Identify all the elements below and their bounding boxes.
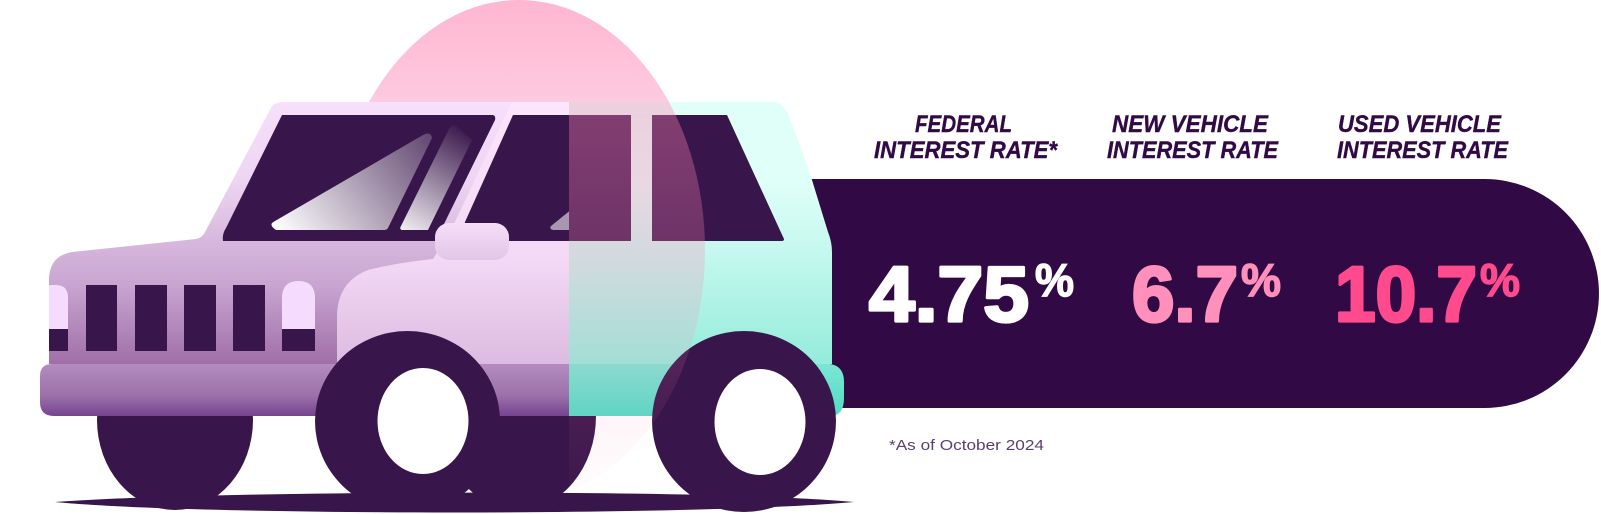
vehicle [40,102,844,512]
windshield [223,115,495,241]
left headlight [49,285,68,351]
grille bars [86,285,265,351]
value: 4.75%: % [1035,254,1074,306]
hidden far wheels [97,322,596,510]
label: used vehicle interest rate [1337,111,1509,164]
side mirror [435,223,509,260]
front wheel [315,331,500,512]
label: new vehicle interest rate [1107,111,1279,164]
rear wheel [652,331,836,512]
windshield glare [272,125,472,230]
side window rear [652,115,784,241]
side window front [460,115,631,241]
door panel [337,102,569,364]
value: 6.7%: 6.7 [1132,250,1238,338]
teal rear body [569,102,832,364]
rates panel [780,179,1599,408]
label: used vehicle interest rate: USED VEHICLE [1338,111,1502,138]
label: federal interest rate: INTEREST RATE* [874,137,1059,164]
label: used vehicle interest rate: INTEREST RATE [1337,137,1509,164]
label: new vehicle interest rate: NEW VEHICLE [1112,111,1269,138]
purple bumper and sill [40,364,569,416]
side window glare [550,212,569,230]
value: 10.7%: % [1480,254,1520,306]
footnote: *As of October 2024 [889,437,1044,454]
label: federal interest rate: FEDERAL [915,111,1012,138]
right headlight [282,281,315,351]
pink circle backdrop [369,0,669,102]
cab and hood body [49,102,569,364]
label: federal interest rate [874,111,1059,164]
teal sill [569,364,844,416]
pink circle overlay [569,102,705,468]
ground shadow [55,493,854,512]
label: new vehicle interest rate: INTEREST RATE [1107,137,1279,164]
value: 10.7%: 10.7 [1335,250,1477,338]
value: 4.75%: 4.75 [869,250,1029,338]
value: 6.7%: % [1241,254,1281,306]
